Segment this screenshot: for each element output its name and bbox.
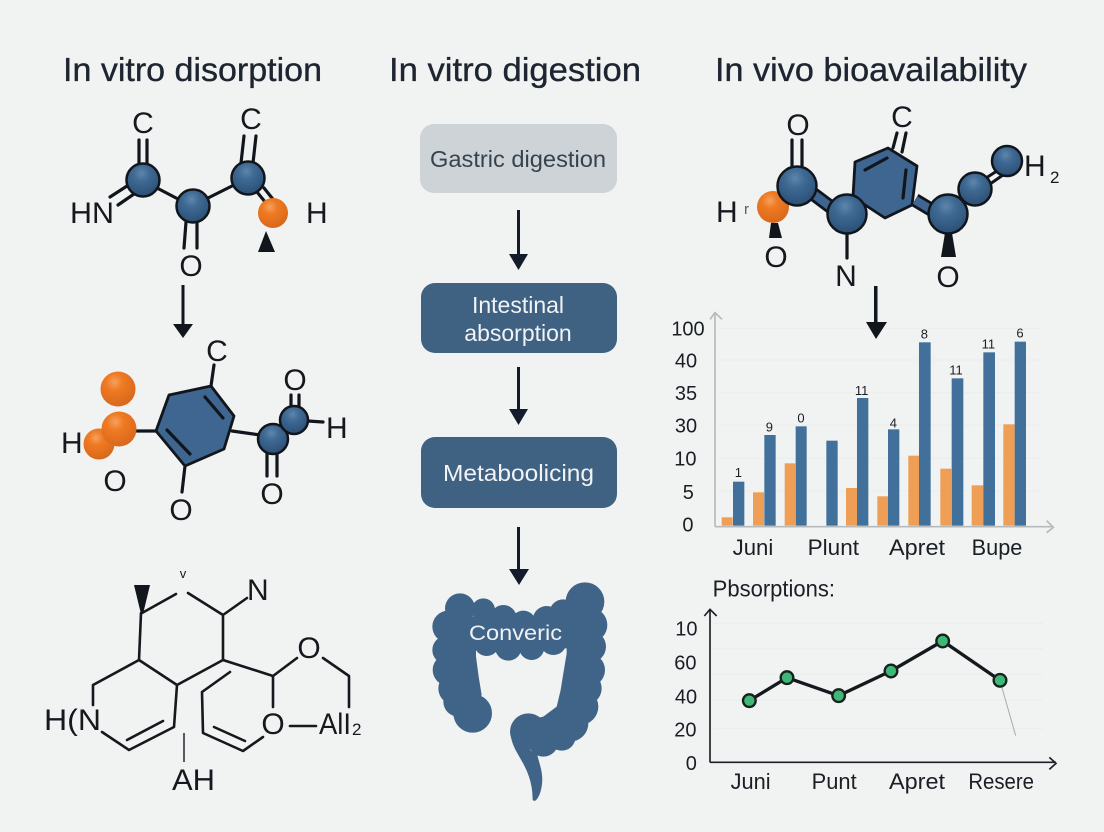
molecule: third skeletal structure: AlI [319, 708, 351, 741]
molecule: in vivo structure: r [744, 201, 749, 218]
arrow: gastric to intestinal [509, 210, 528, 270]
bar chart: absorption by month: 8 [921, 326, 928, 341]
bar chart: absorption by month: 35 [675, 383, 697, 405]
bar chart: absorption by month: Juni [733, 535, 773, 560]
arrow: molecule to bar chart [866, 286, 887, 339]
molecule: third skeletal structure: O [297, 632, 321, 665]
molecule: in vivo structure: C [891, 101, 913, 134]
step: metabolising [421, 437, 617, 508]
bar chart: absorption by month: 0 [797, 411, 805, 426]
bar chart: absorption by month: 10 [674, 449, 696, 471]
line chart: absorption trend: 60 [674, 652, 696, 674]
molecule: first disorption structure: O [179, 250, 203, 283]
bar chart: absorption by month: 9 [766, 420, 773, 435]
bar chart: absorption by month: Plunt [808, 535, 859, 560]
step: gastric digestion [420, 124, 617, 193]
molecule: third skeletal structure: H(N [44, 704, 101, 737]
molecule: third skeletal structure: 2 [352, 720, 361, 739]
step: gastric digestion: Gastric digestion [430, 146, 606, 172]
molecule: second disorption structure: O [169, 494, 193, 527]
molecule: in vivo structure: O [786, 109, 810, 142]
bar chart: absorption by month: 11 [982, 336, 995, 351]
molecule: third skeletal structure [44, 566, 361, 797]
molecule: third skeletal structure: O [261, 708, 285, 741]
molecule: second disorption structure: C [206, 335, 228, 368]
molecule: in vivo structure: O [764, 241, 788, 274]
bar chart: absorption by month: Apret [889, 535, 945, 560]
molecule: second disorption structure [61, 335, 348, 527]
line chart: absorption trend: 10 [675, 619, 697, 641]
arrow: molecule one to two [173, 285, 193, 338]
molecule: first disorption structure [70, 103, 328, 283]
molecule: third skeletal structure: AH [172, 764, 215, 797]
step: intestinal absorption [421, 283, 617, 353]
step: metabolising: Metaboolicing [443, 460, 594, 486]
molecule: third skeletal structure: N [247, 574, 269, 607]
molecule: second disorption structure: O [283, 364, 307, 397]
molecule: in vivo structure: 2 [1050, 168, 1059, 187]
bar chart: absorption by month: 4 [890, 415, 897, 430]
molecule: third skeletal structure: v [180, 566, 187, 581]
step: intestinal absorption: absorption [464, 320, 572, 346]
bar chart: absorption by month: 100 [671, 318, 705, 340]
bar chart: absorption by month: 1 [735, 465, 742, 480]
heading: in vitro disorption: In vitro disorption [63, 51, 322, 88]
molecule: in vivo structure: H [1024, 150, 1046, 183]
line chart: absorption trend: 0 [686, 753, 697, 775]
line chart: absorption trend: Pbsorptions: [713, 576, 835, 602]
step: intestinal absorption: Intestinal [472, 292, 564, 318]
arrow: intestinal to metabolising [509, 367, 528, 425]
icon: large intestine: Converic [469, 621, 562, 645]
bar chart: absorption by month: 11 [855, 383, 868, 398]
molecule: second disorption structure: H [61, 427, 83, 460]
bar chart: absorption by month: Bupe [972, 535, 1022, 560]
icon: large intestine [432, 582, 607, 801]
line chart: absorption trend: Resere [968, 769, 1034, 794]
molecule: second disorption structure: H [326, 412, 348, 445]
bar chart: absorption by month: 11 [949, 362, 963, 377]
arrow: metabolising to intestine [509, 527, 529, 585]
molecule: first disorption structure: C [132, 107, 154, 140]
molecule: in vivo structure: O [936, 261, 960, 294]
bar chart: absorption by month: 0 [682, 515, 694, 537]
bar chart: absorption by month: 30 [675, 416, 697, 438]
bar chart: absorption by month: 40 [675, 351, 697, 373]
molecule: in vivo structure: N [835, 260, 857, 293]
bar chart: absorption by month: 6 [1016, 325, 1024, 340]
line chart: absorption trend: Punt [812, 769, 857, 794]
heading: in vivo bioavailability: In vivo bioavailability [715, 51, 1028, 88]
line chart: absorption trend: 20 [674, 720, 696, 742]
heading: in vitro digestion: In vitro digestion [389, 51, 641, 88]
molecule: first disorption structure: H [306, 197, 328, 230]
molecule: in vivo structure [716, 101, 1059, 294]
molecule: second disorption structure: O [103, 465, 127, 498]
bar chart: absorption by month [671, 313, 1053, 560]
molecule: in vivo structure: H [716, 196, 738, 229]
bar chart: absorption by month: 5 [683, 482, 694, 504]
molecule: first disorption structure: C [240, 103, 262, 136]
line chart: absorption trend: Apret [889, 769, 945, 794]
molecule: second disorption structure: O [260, 478, 284, 511]
molecule: first disorption structure: HN [70, 197, 114, 230]
line chart: absorption trend [674, 576, 1056, 794]
line chart: absorption trend: Juni [731, 769, 771, 794]
line chart: absorption trend: 40 [675, 686, 697, 708]
